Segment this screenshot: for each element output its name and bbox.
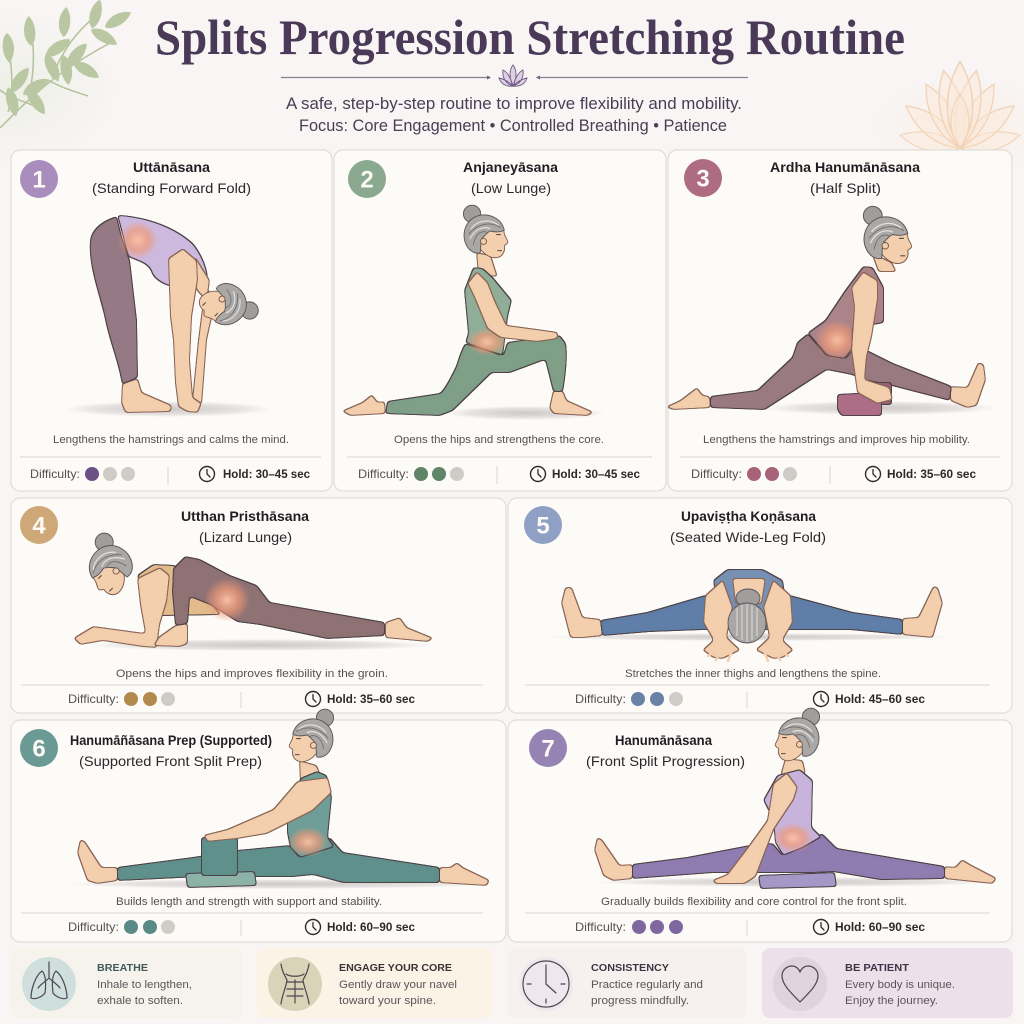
badge 4 xyxy=(20,506,58,544)
figure: half split xyxy=(665,206,998,416)
background wash: left xyxy=(0,10,120,170)
pose title 7: Hanumānāsana xyxy=(615,732,712,748)
pose title 2: (Low Lunge) xyxy=(471,180,551,196)
hold time 2: Hold: 30–45 sec xyxy=(552,469,641,481)
hold time 2 xyxy=(530,466,641,482)
subtitle: Focus: Core Engagement • Controlled Breathing • Patience xyxy=(299,116,727,135)
hold time 3: Hold: 35–60 sec xyxy=(887,469,977,481)
tip: breathe xyxy=(11,948,243,1018)
badge 7 xyxy=(529,729,567,767)
title: Splits Progression Stretching Routine xyxy=(155,9,905,65)
figure: supported front split prep xyxy=(65,709,495,889)
difficulty 2 xyxy=(358,467,464,481)
hold time 1: Hold: 30–45 sec xyxy=(223,469,311,481)
figure: low lunge xyxy=(341,205,605,420)
tip: engage your core xyxy=(257,948,493,1018)
background wash: right xyxy=(870,75,1024,175)
figure: standing forward fold xyxy=(63,215,273,417)
hold time 3 xyxy=(866,466,977,482)
badge 1: 1 xyxy=(32,166,46,194)
description 2: Opens the hips and strengthens the core. xyxy=(394,434,604,446)
hold time 4: Hold: 35–60 sec xyxy=(327,694,416,706)
panel: step 6 xyxy=(11,709,506,942)
badge 3 xyxy=(684,159,722,197)
pose title 7: (Front Split Progression) xyxy=(586,753,745,769)
panel: step 4 xyxy=(11,498,506,713)
hold time 5 xyxy=(814,692,926,706)
pose title 7 xyxy=(586,732,745,769)
badge 6: 6 xyxy=(32,736,46,762)
icon: abdomen xyxy=(268,957,322,1011)
badge 2: 2 xyxy=(360,166,374,194)
panel: step 5 xyxy=(508,498,1012,713)
hold time 7 xyxy=(814,920,926,934)
text: breathe: exhale to soften. xyxy=(97,995,183,1007)
difficulty 1: Difficulty: xyxy=(30,467,80,481)
hold time 6 xyxy=(306,920,416,934)
description 5: Stretches the inner thighs and lengthens the spine. xyxy=(625,668,881,680)
text: engage your core: Gently draw your navel xyxy=(339,979,457,991)
pose title 6: Hanumāñāsana Prep (Supported) xyxy=(70,732,272,748)
panel: step 2 xyxy=(334,150,666,491)
text: engage your core: toward your spine. xyxy=(339,995,436,1007)
text: breathe: Inhale to lengthen, xyxy=(97,979,192,991)
badge 5: 5 xyxy=(536,512,550,540)
icon: clock xyxy=(519,957,573,1011)
icon: lungs xyxy=(22,957,76,1011)
badge 7: 7 xyxy=(541,736,555,762)
difficulty 6 xyxy=(68,920,175,934)
subtitle xyxy=(286,94,742,135)
hold time 6: Hold: 60–90 sec xyxy=(327,922,416,934)
description 4: Opens the hips and improves flexibility in the groin. xyxy=(116,668,388,680)
badge 4: 4 xyxy=(32,512,46,540)
panel: step 7 xyxy=(508,708,1012,942)
title divider with lotus xyxy=(281,65,748,86)
subtitle: A safe, step-by-step routine to improve flexibility and mobility. xyxy=(286,94,742,113)
difficulty 4 xyxy=(68,692,175,706)
pose title 6 xyxy=(70,732,272,769)
text: consistency: CONSISTENCY xyxy=(591,962,669,974)
text: engage your core: ENGAGE YOUR CORE xyxy=(339,962,452,974)
pose title 4: (Lizard Lunge) xyxy=(199,529,292,545)
difficulty 1 xyxy=(30,467,135,481)
hold time 1 xyxy=(200,466,311,482)
badge 6 xyxy=(20,729,58,767)
hold time 7: Hold: 60–90 sec xyxy=(835,922,926,934)
difficulty 3: Difficulty: xyxy=(691,467,742,481)
description 1: Lengthens the hamstrings and calms the mind. xyxy=(53,434,289,446)
difficulty 7 xyxy=(575,920,683,934)
text: consistency: progress mindfully. xyxy=(591,995,689,1007)
text: be patient: Every body is unique. xyxy=(845,979,955,991)
pose title 5: Upaviṣṭha Koṇāsana xyxy=(681,508,816,524)
text: engage your core xyxy=(339,962,457,1007)
pose title 1 xyxy=(92,159,251,196)
hold time 5: Hold: 45–60 sec xyxy=(835,694,926,706)
decoration: leaf branch xyxy=(0,0,134,128)
text: breathe xyxy=(97,962,192,1007)
badge 5 xyxy=(524,506,562,544)
badge 3: 3 xyxy=(696,166,710,192)
pose title 3 xyxy=(770,159,920,196)
pose title 1: (Standing Forward Fold) xyxy=(92,180,251,196)
difficulty 2: Difficulty: xyxy=(358,467,409,481)
tip: be patient xyxy=(762,948,1013,1018)
description 7: Gradually builds flexibility and core control for the front split. xyxy=(601,896,907,908)
figure: front split progression xyxy=(590,708,1000,889)
pose title 6: (Supported Front Split Prep) xyxy=(79,753,262,769)
text: consistency: Practice regularly and xyxy=(591,979,703,991)
pose title 1: Uttānāsana xyxy=(133,159,210,175)
tip: consistency xyxy=(508,948,747,1018)
pose title 5: (Seated Wide-Leg Fold) xyxy=(670,529,826,545)
icon: heart xyxy=(773,957,827,1011)
pose title 3: (Half Split) xyxy=(810,180,881,196)
badge 1 xyxy=(20,160,58,198)
pose title 2 xyxy=(463,159,558,196)
badge 2 xyxy=(348,160,386,198)
text: consistency xyxy=(591,962,703,1007)
pose title 3: Ardha Hanumānāsana xyxy=(770,159,920,175)
text: breathe: BREATHE xyxy=(97,962,148,974)
panel: step 1 xyxy=(11,150,332,491)
text: be patient xyxy=(845,962,955,1007)
difficulty 7: Difficulty: xyxy=(575,920,626,934)
panel: step 3 xyxy=(665,150,1012,491)
pose title 2: Anjaneyāsana xyxy=(463,159,558,175)
pose title 5 xyxy=(670,508,826,545)
difficulty 5 xyxy=(575,692,683,706)
decoration: lotus outline xyxy=(898,62,1022,157)
difficulty 5: Difficulty: xyxy=(575,692,626,706)
pose title 4: Utthan Pristhāsana xyxy=(181,508,309,524)
text: be patient: Enjoy the journey. xyxy=(845,995,938,1007)
description 3: Lengthens the hamstrings and improves hip mobility. xyxy=(703,434,970,446)
text: be patient: BE PATIENT xyxy=(845,962,910,974)
pose title 4 xyxy=(181,508,309,545)
hold time 4 xyxy=(306,692,416,706)
difficulty 3 xyxy=(691,467,797,481)
difficulty 4: Difficulty: xyxy=(68,692,119,706)
description 6: Builds length and strength with support and stability. xyxy=(116,896,382,908)
difficulty 6: Difficulty: xyxy=(68,920,119,934)
figure: seated wide-leg fold xyxy=(545,569,955,661)
figure: lizard lunge xyxy=(71,529,435,651)
